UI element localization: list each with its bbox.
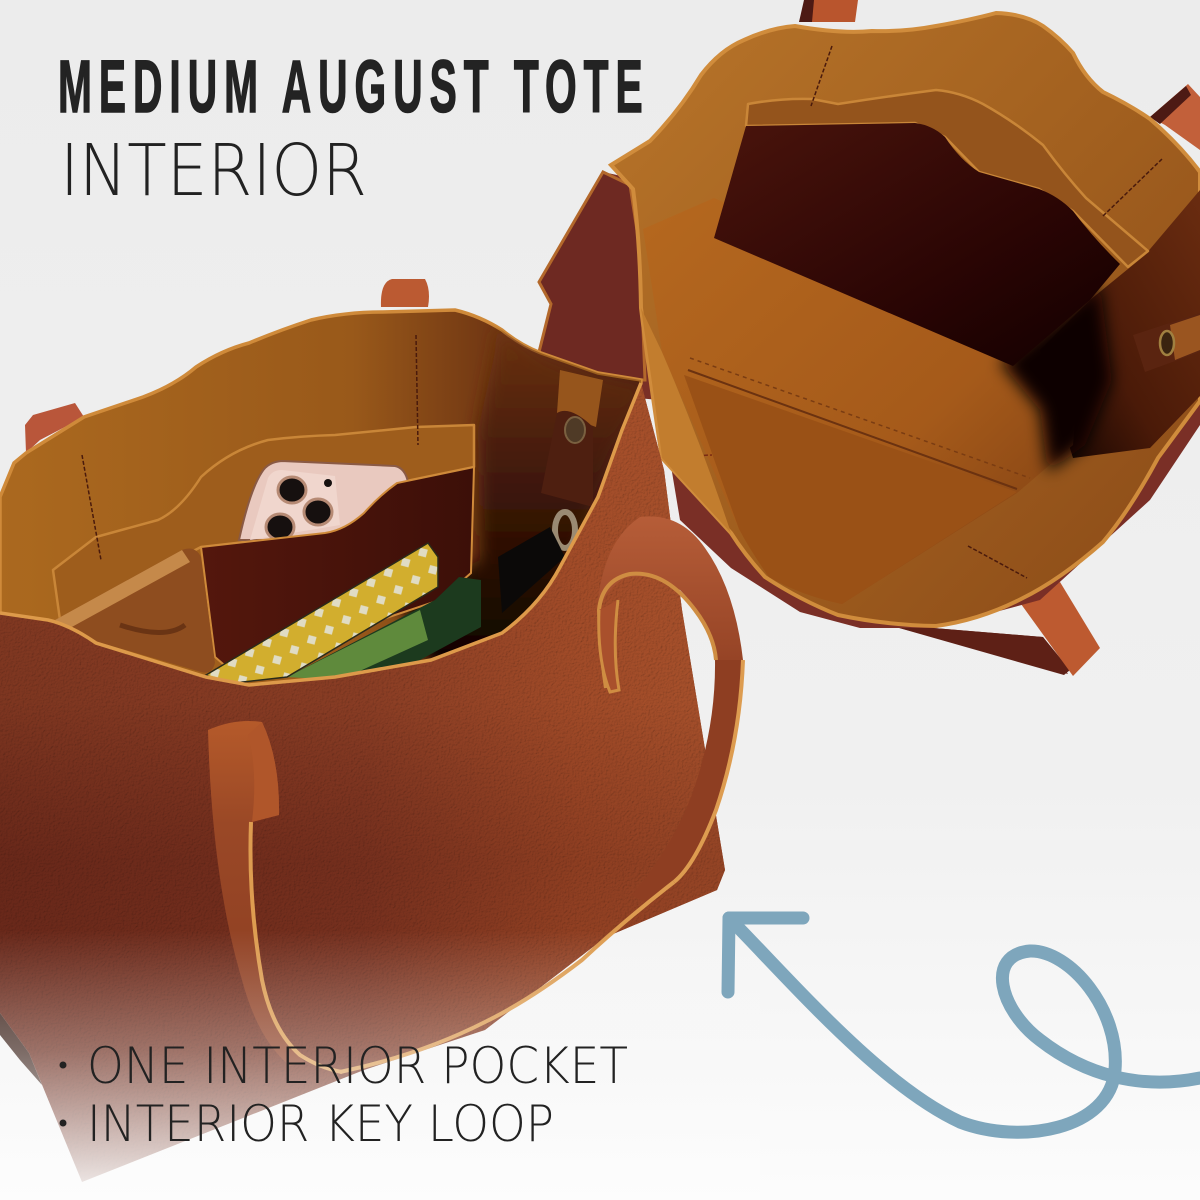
right bag floor seam (688, 358, 1030, 489)
right bag key loop (1133, 313, 1200, 372)
left bag right side panel rim band (500, 383, 725, 1000)
left bag (0, 279, 760, 1200)
left bag bottom side panel (0, 1013, 42, 1085)
right bag stitching (662, 46, 1162, 578)
left bag dark interior (400, 330, 650, 670)
keys (498, 512, 575, 613)
right bag suede interior (611, 13, 1200, 626)
left bag back handle top (381, 279, 429, 307)
key loop strap (541, 370, 603, 507)
right bag outer leather (539, 172, 1200, 628)
curly blue arrow (728, 918, 1200, 1132)
right bag floor (643, 198, 1077, 604)
right handle tab (599, 600, 619, 692)
green wallet (287, 577, 481, 680)
right bag shadow on floor (1000, 285, 1112, 472)
title light line: INTERIOR (60, 129, 367, 212)
left handle loop tab (248, 722, 279, 822)
right bag interior pocket (714, 123, 1120, 366)
left bag pocket stitching (82, 335, 418, 560)
left bag front shading (0, 383, 725, 1182)
right bag seen from above (539, 0, 1200, 676)
right bag floor lower panel (684, 375, 1017, 604)
left bag back handle left (25, 403, 84, 453)
right bag side handle (1150, 84, 1200, 150)
right bag bottom handle (885, 582, 1100, 676)
feature: one interior pocket: ONE INTERIOR POCKET (87, 1037, 628, 1095)
left bag leather grain (0, 388, 724, 1116)
left bag pocket leather (201, 467, 474, 670)
feature list (60, 1037, 628, 1153)
phone cameras (266, 477, 332, 540)
right bag dark side wall (1040, 190, 1200, 458)
left bag rim edge (0, 383, 641, 685)
bag bottom tan edge (340, 882, 674, 1072)
bag fade to white (0, 930, 760, 1200)
left bag pocket suede flap (53, 425, 474, 620)
right bag rim highlight suede fold (641, 308, 731, 533)
wallet (55, 549, 215, 673)
left bag front panel (0, 383, 725, 1182)
title bold line: MEDIUM AUGUST TOTE (58, 45, 643, 128)
right handle inner tan edge (599, 574, 716, 688)
phone (239, 461, 408, 540)
yellow patterned notebook (206, 543, 438, 684)
feature: interior key loop: INTERIOR KEY LOOP (87, 1095, 554, 1153)
right bag back handle top (799, 0, 858, 22)
left bag suede back panel (0, 310, 641, 700)
right handle strap (598, 516, 743, 905)
right bag pocket flap suede (746, 90, 1148, 267)
title (58, 45, 643, 212)
right bag outer leather texture (539, 172, 645, 380)
left handle strap (208, 721, 342, 1072)
